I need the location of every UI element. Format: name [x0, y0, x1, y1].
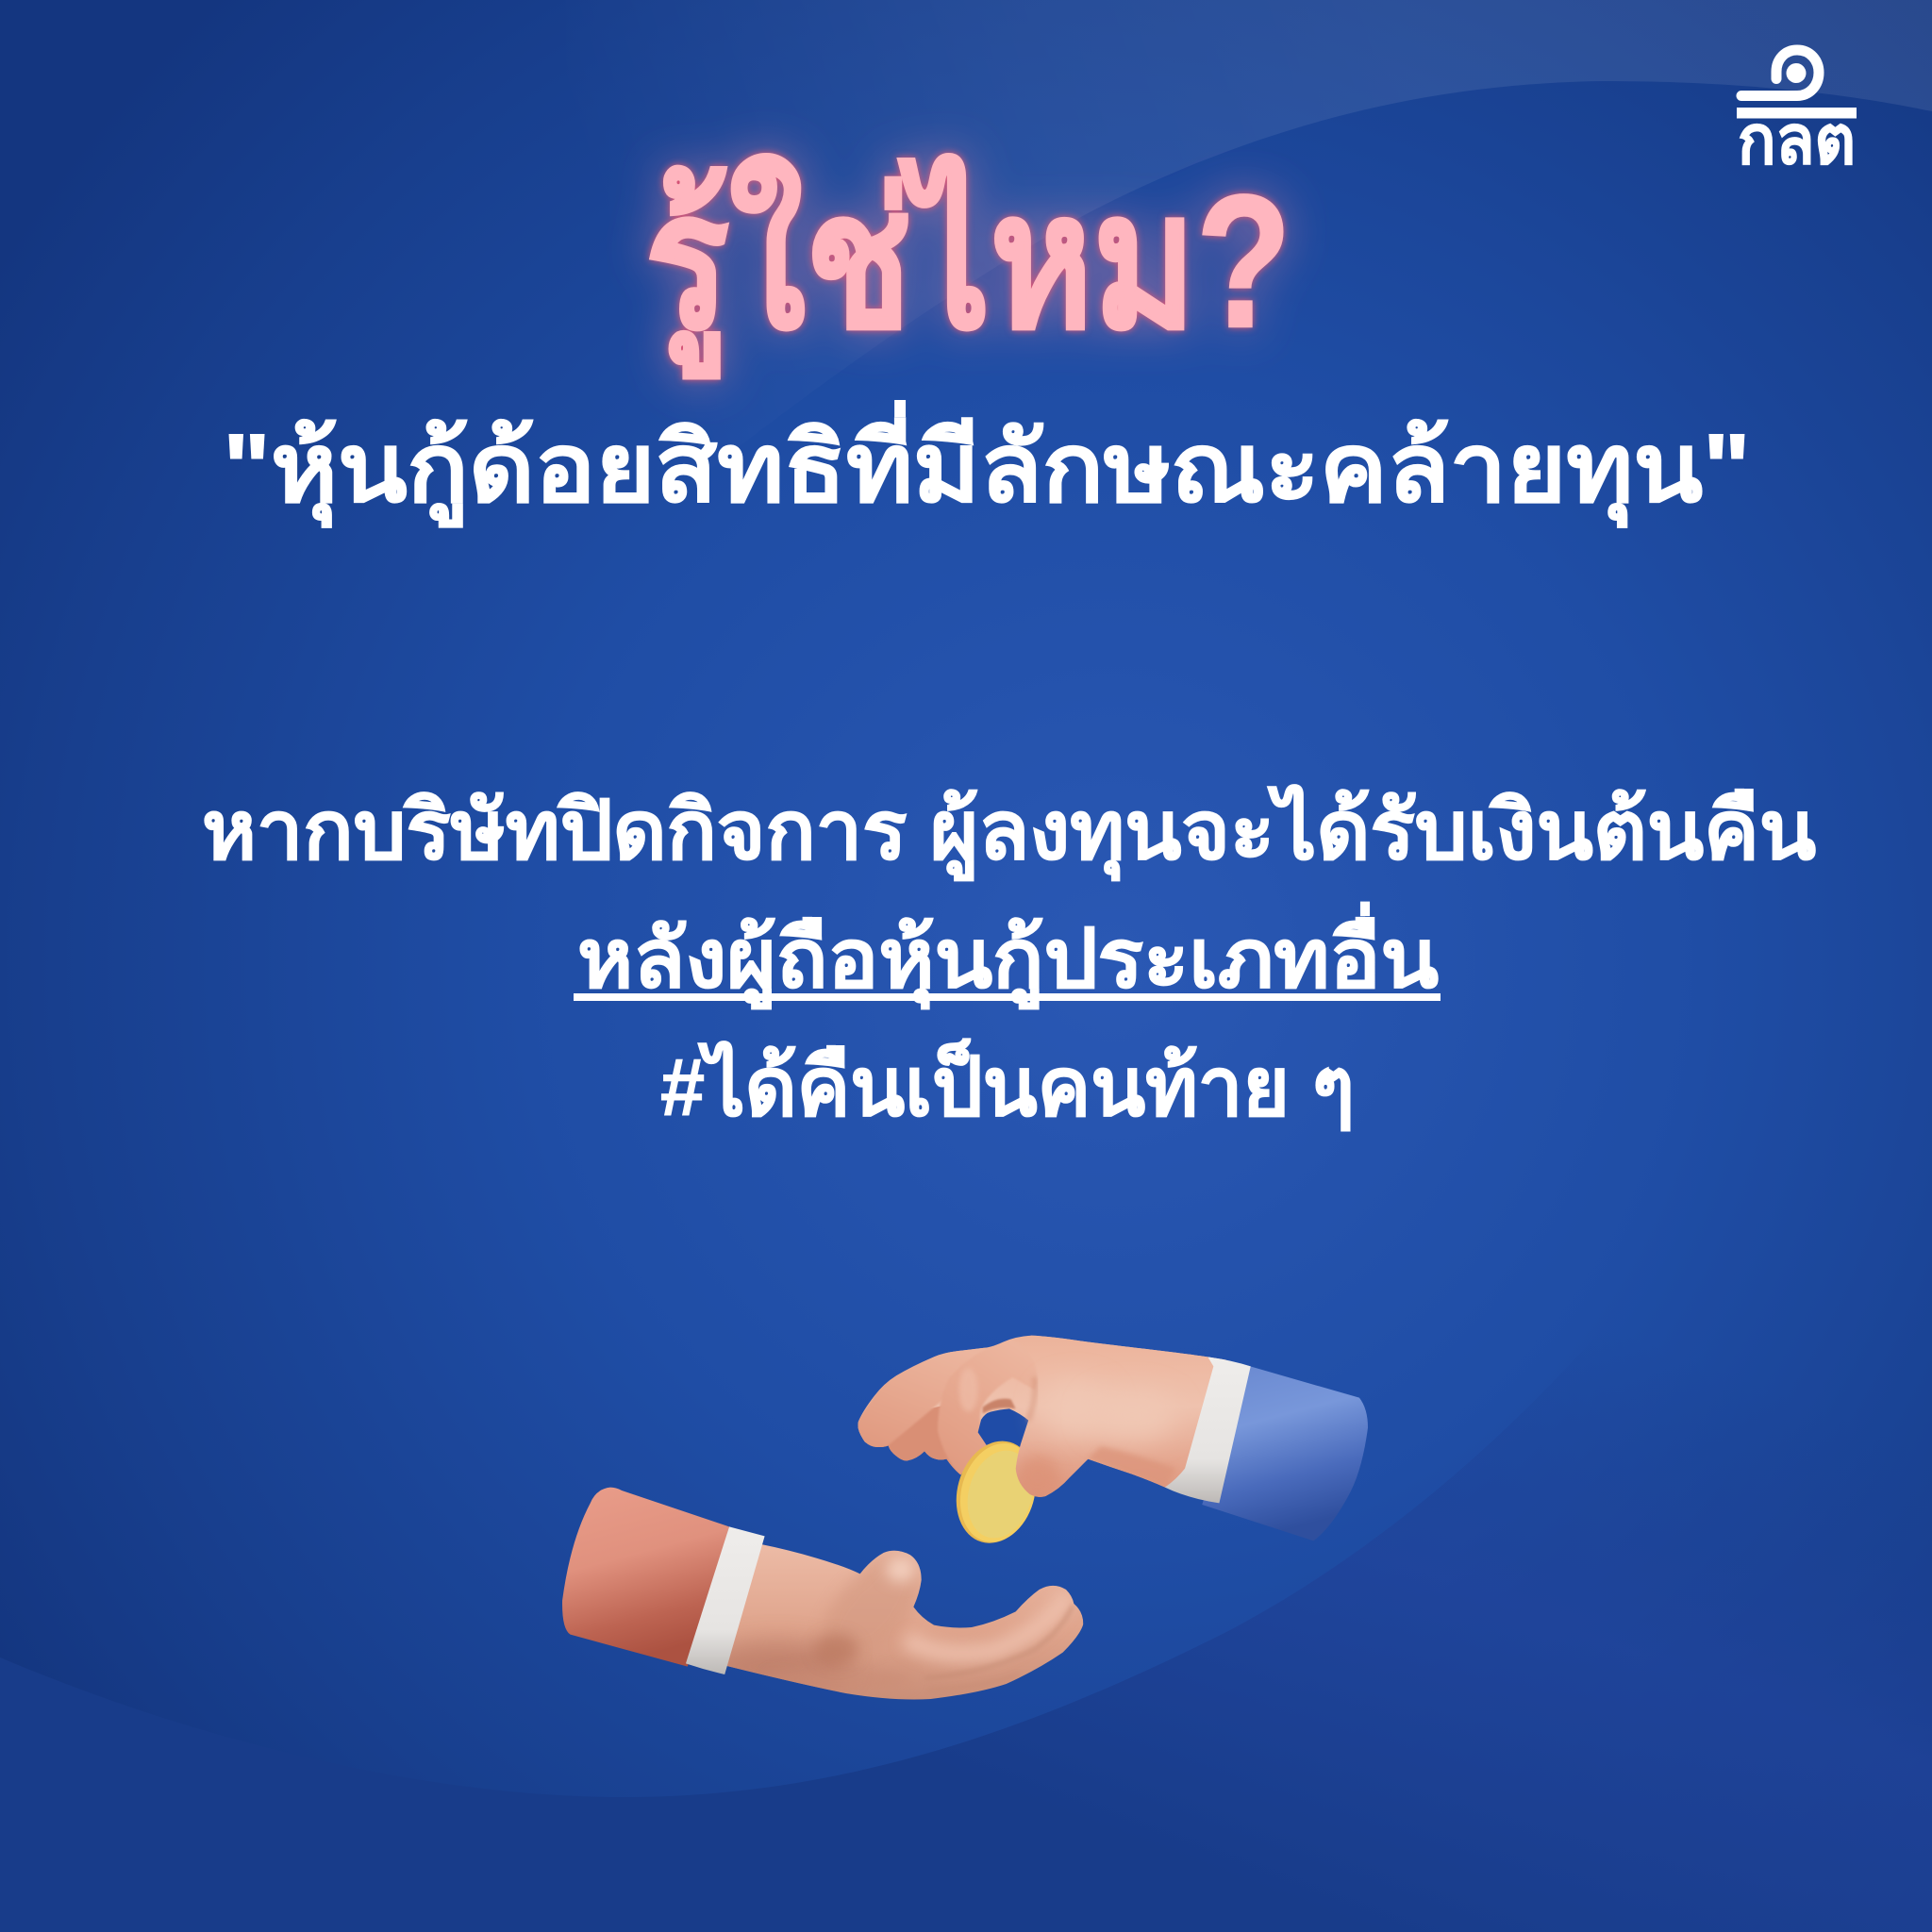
body line 1: หากบริษัทปิดกิจการ ผู้ลงทุนจะได้รับเงินต้นคืน: [202, 784, 1816, 881]
body line 3: #ได้คืนเป็นคนท้าย ๆ: [660, 1038, 1355, 1133]
icon: upper cuff: [1165, 1357, 1251, 1503]
logo: [1737, 50, 1857, 178]
logo wordmark: กลต: [1738, 103, 1856, 178]
icon: upper sleeve: [1202, 1366, 1368, 1541]
icon: lower hand: [726, 1544, 1083, 1700]
icon: coin: [944, 1432, 1047, 1553]
subtitle: "หุ้นกู้ด้อยสิทธิที่มีลักษณะคล้ายทุน": [223, 400, 1751, 528]
illustration: hands passing coin: [562, 1330, 1368, 1705]
icon: thumb and palm: [1015, 1336, 1226, 1497]
icon: upper hand: [849, 1330, 1233, 1553]
icon: curled fingers behind: [858, 1406, 962, 1475]
icon: pointing finger: [858, 1347, 986, 1447]
icon: gap between thumb and finger: [978, 1408, 1029, 1446]
icon: index finger: [938, 1340, 1037, 1476]
title: รู้ใช่ไหม?: [645, 153, 1291, 379]
body text: [202, 784, 1816, 1133]
logo emblem: [1737, 50, 1857, 119]
icon: sleeves and cuffs: [562, 1357, 1368, 1674]
icon: lower cuff: [686, 1526, 765, 1674]
icon: lower sleeve: [562, 1488, 729, 1667]
body line 2 underlined: หลังผู้ถือหุ้นกู้ประเภทอื่น: [577, 901, 1439, 1009]
